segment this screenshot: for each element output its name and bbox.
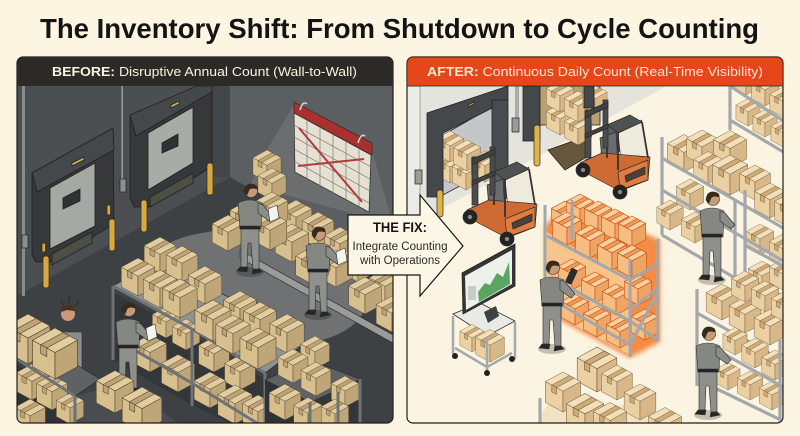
forklift: back — [576, 100, 650, 199]
loading door with stacked pallet: left — [427, 86, 508, 197]
header bar: after — [407, 57, 783, 86]
centre shelf unit — [112, 270, 300, 422]
front-left shelf — [18, 314, 176, 422]
highlighted counting shelf — [545, 194, 660, 358]
panel frame: before — [17, 57, 393, 423]
handheld scanner — [566, 268, 578, 284]
panel: before — [6, 57, 408, 436]
right-hand low shelf — [264, 336, 362, 422]
stressed worker — [60, 296, 82, 368]
worker: upper right aisle — [698, 192, 735, 285]
callout text: Integrate Counting — [352, 241, 448, 253]
back shelf with box piles — [212, 150, 408, 343]
worker with clipboard: back — [236, 184, 279, 277]
lower right shelf unit — [695, 270, 782, 422]
header bar: before — [17, 57, 393, 86]
safety bollards — [437, 125, 540, 217]
callout heading: THE FIX: — [373, 220, 427, 235]
header text: before: BEFORE: Disruptive Annual Count (Wall-to-Wall) — [52, 64, 357, 79]
loading dock door: right — [130, 86, 212, 207]
monitor chart — [478, 262, 510, 302]
loading dock door: left — [32, 128, 114, 265]
rolling cart with dashboard monitor — [452, 244, 515, 376]
warehouse scene: before — [18, 86, 392, 422]
callout text second line: with Operations — [359, 255, 440, 267]
worker with handheld scanner — [538, 261, 578, 354]
worker with scanner: centre aisle — [114, 303, 157, 396]
mid right shelf unit — [656, 130, 782, 294]
header text: after: AFTER: Continuous Daily Count (Real-Time Visibility) — [427, 64, 763, 79]
callout arrow: the fix — [348, 195, 463, 296]
worker with clipboard: middle — [304, 227, 347, 320]
bottom shelf with boxes — [538, 346, 682, 422]
title: The Inventory Shift: From Shutdown to Cycle Counting — [40, 13, 759, 44]
wall switch boxes — [415, 118, 519, 184]
panel: after — [407, 57, 800, 436]
calendar with crossed-out dates — [294, 102, 372, 212]
forklift: front — [463, 147, 537, 246]
wall switch boxes — [22, 179, 126, 248]
safety bollards — [42, 163, 213, 288]
warehouse scene: after — [408, 86, 782, 422]
boxes on centre shelf — [121, 237, 304, 369]
monitor — [462, 244, 515, 314]
panel frame: after — [407, 57, 783, 423]
loading door with stacked pallet: right — [523, 81, 607, 170]
worker: lower right aisle — [694, 327, 731, 420]
top right shelf unit — [728, 86, 782, 154]
